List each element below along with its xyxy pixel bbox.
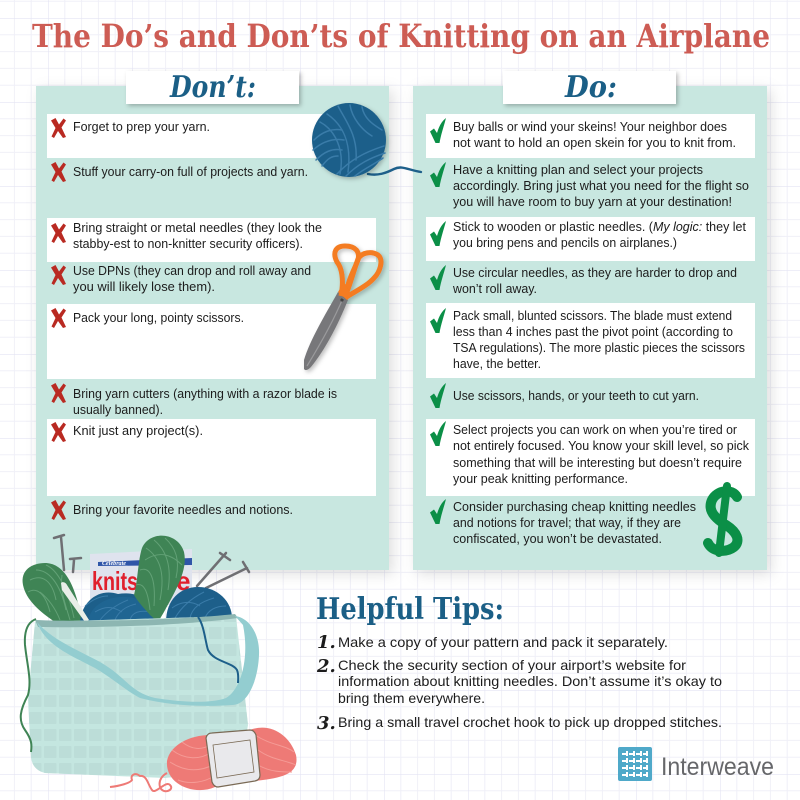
item: yarn cutters bbox=[51, 383, 337, 417]
item: blunted scissors: Pack small, blunted scissors. The blade must extend bbox=[453, 308, 732, 323]
item: cheap needles: Consider purchasing cheap knitting needles bbox=[453, 499, 696, 514]
tip 1: Make a copy of your pattern and pack it separately. bbox=[338, 635, 668, 650]
item: carry-on bbox=[51, 162, 308, 182]
item: wind skeins bbox=[430, 118, 736, 150]
item: blunted scissors: less than 4 inches past the pivot point (according to bbox=[453, 324, 733, 339]
item: select projects: Select projects you can work on when you’re tired or bbox=[453, 422, 738, 437]
panel: don't bbox=[36, 70, 389, 570]
tip 3 bbox=[317, 713, 722, 734]
tip 2: 2. bbox=[316, 656, 336, 677]
bag rim bbox=[35, 614, 238, 627]
tip 1: 1. bbox=[317, 632, 336, 653]
skeins and balls bbox=[23, 536, 232, 622]
item: wooden needles bbox=[430, 219, 746, 250]
heading: don't: Don’t: bbox=[169, 70, 256, 105]
item: knitting plan bbox=[430, 162, 749, 209]
book: knits bbox=[92, 566, 138, 596]
item: favorite needles: Bring your favorite needles and notions. bbox=[73, 502, 293, 517]
item: prep yarn bbox=[51, 118, 210, 138]
item: knitting plan: accordingly. Bring just what you need for the flight so bbox=[453, 178, 749, 193]
item: any project bbox=[51, 422, 203, 442]
heading: do bbox=[503, 70, 676, 105]
tip 3: Bring a small travel crochet hook to pick up dropped stitches. bbox=[338, 715, 722, 730]
item: straight needles: Bring straight or metal needles (they look the bbox=[73, 220, 322, 235]
item: pointy scissors bbox=[51, 308, 244, 328]
bag body bbox=[28, 616, 248, 778]
icon: dollar sign bbox=[708, 486, 737, 553]
tip 2: information about knitting needles. Don’t assume it’s okay to bbox=[338, 674, 722, 689]
item: blunted scissors bbox=[430, 308, 745, 371]
item: blunted scissors: have, the better. bbox=[453, 356, 541, 371]
blue yarn strand bbox=[198, 617, 238, 683]
item: select projects bbox=[430, 421, 750, 486]
item: wooden needles: Stick to wooden or plastic needles. (My logic: they let bbox=[453, 219, 746, 234]
item: pointy scissors: Pack your long, pointy scissors. bbox=[73, 310, 244, 325]
logo: Interweave: Interweave bbox=[661, 753, 774, 781]
icon: scissors bbox=[304, 246, 381, 370]
item: yarn cutters: usually banned). bbox=[73, 402, 163, 417]
item: select projects: your peak knitting performance. bbox=[453, 471, 628, 486]
heading: don't bbox=[126, 70, 299, 105]
item: DPNs bbox=[51, 263, 311, 294]
tip 2: bring them everywhere. bbox=[338, 691, 485, 706]
item: cheap needles: and notions for travel; that way, if they are bbox=[453, 515, 681, 530]
item: wind skeins: Buy balls or wind your skeins! Your neighbor does bbox=[453, 119, 727, 134]
bag strap bbox=[37, 616, 259, 706]
item: favorite needles bbox=[51, 500, 293, 520]
item: cut yarn: Use scissors, hands, or your teeth to cut yarn. bbox=[453, 388, 699, 403]
tip 2: Check the security section of your airport’s website for bbox=[338, 658, 686, 673]
item: straight needles bbox=[51, 220, 322, 251]
book bbox=[90, 549, 192, 605]
item: select projects: not entirely focused. You know your skill level, so pick bbox=[453, 438, 750, 453]
illustration: knitting bag with yarn bbox=[21, 535, 297, 791]
heading: helpful tips: Helpful Tips: bbox=[316, 592, 504, 627]
item: cheap needles: confiscated, you won’t be devastated. bbox=[453, 531, 662, 546]
pink yarn ball bbox=[110, 728, 297, 791]
tip 3: 3. bbox=[317, 713, 336, 734]
item: carry-on: Stuff your carry-on full of projects and yarn. bbox=[73, 164, 308, 179]
icon: blue yarn ball bbox=[312, 103, 421, 177]
item: prep yarn: Forget to prep your yarn. bbox=[73, 119, 210, 134]
item: knitting plan: Have a knitting plan and select your projects bbox=[453, 162, 703, 177]
item: any project: Knit just any project(s). bbox=[73, 423, 203, 438]
book: Celebrate bbox=[102, 561, 126, 567]
item: wind skeins: not want to hold an open skein for you to knit from. bbox=[453, 135, 736, 150]
logo: Interweave bbox=[618, 747, 774, 781]
green yarn strand bbox=[21, 619, 36, 752]
item: DPNs: Use DPNs (they can drop and roll away and bbox=[73, 263, 311, 278]
item: cheap needles bbox=[430, 499, 696, 546]
needles bbox=[54, 535, 249, 588]
item: straight needles: stabby-est to non-knitter security officers). bbox=[73, 236, 303, 251]
item: circular needles bbox=[430, 265, 737, 296]
item: cut yarn bbox=[430, 383, 699, 408]
item: yarn cutters: Bring yarn cutters (anything with a razor blade is bbox=[73, 386, 337, 401]
item: circular needles: won’t roll away. bbox=[452, 281, 537, 296]
heading: do: Do: bbox=[564, 70, 617, 105]
item: circular needles: Use circular needles, as they are harder to drop and bbox=[453, 265, 737, 280]
item: select projects: something that will be interesting but doesn’t require bbox=[453, 455, 742, 470]
tip 2 bbox=[316, 656, 722, 706]
item: DPNs: you will likely lose them). bbox=[73, 279, 215, 294]
item: wooden needles: you bring pens and pencils on airplanes.) bbox=[453, 235, 677, 250]
panel: do bbox=[413, 70, 767, 570]
tip 1 bbox=[317, 632, 668, 653]
item: blunted scissors: TSA regulations). The more plastic pieces the scissors bbox=[453, 340, 745, 355]
item: knitting plan: you will have room to buy yarn at your destination! bbox=[453, 194, 732, 209]
book: e bbox=[176, 566, 190, 596]
